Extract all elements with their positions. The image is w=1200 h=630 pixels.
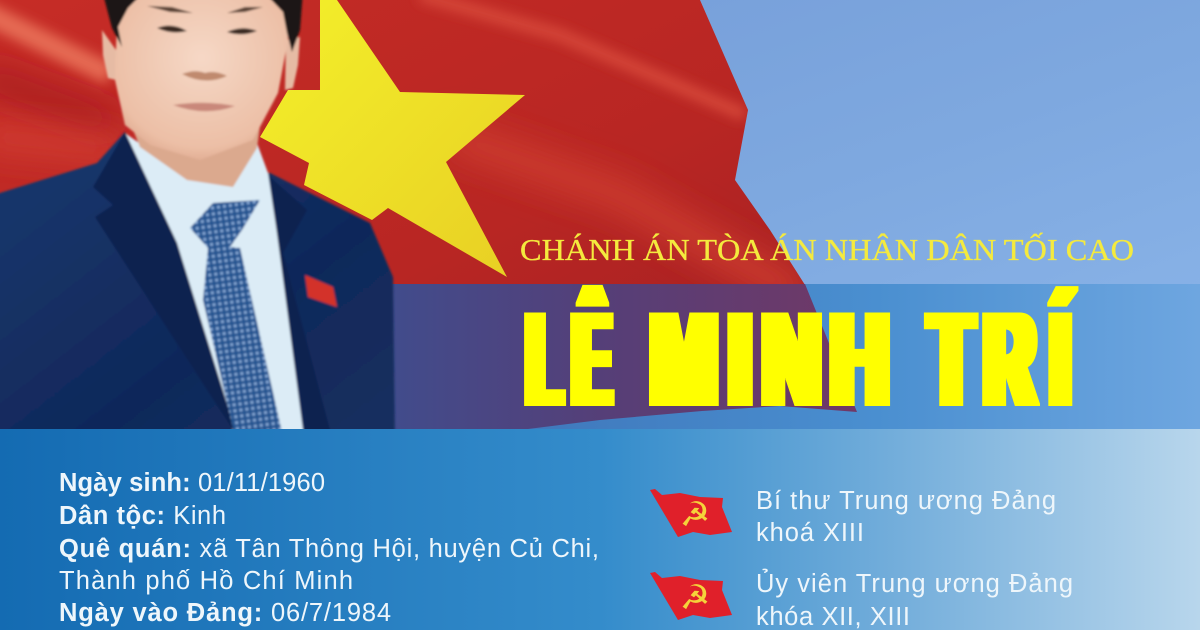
biography text: Ngày vào Đảng: 06/7/1984: [59, 599, 391, 627]
portrait: [0, 0, 395, 445]
subtitle: CHÁNH ÁN TÒA ÁN NHÂN DÂN TỐI CAO: [520, 231, 1134, 267]
neck: [125, 110, 262, 187]
jacket: [0, 132, 395, 445]
name heading: LÊ: [527, 285, 610, 434]
left lapel: [93, 132, 243, 445]
biography text: Dân tộc: Kinh: [59, 502, 226, 530]
yellow star: [260, 0, 525, 277]
name heading: MINH: [651, 286, 888, 434]
tie: [190, 200, 285, 445]
nose: [182, 71, 227, 81]
eyebrows: [147, 6, 263, 13]
party flag icon 2: ☭: [680, 578, 710, 618]
bottom panel: [0, 429, 1200, 630]
biography text: [59, 469, 599, 627]
name heading: TRÍ: [930, 286, 1072, 434]
waving red flag: [0, 0, 804, 284]
hair: [102, 0, 303, 52]
party flag icon 1: ☭: [680, 495, 710, 535]
face: [115, 0, 288, 160]
party flag icon 2: [650, 572, 732, 620]
party positions text: [756, 487, 1073, 630]
party positions text: Bí thư Trung ương Đảng: [756, 487, 1056, 515]
biography text: Thành phố Hồ Chí Minh: [59, 567, 353, 595]
shirt: [125, 133, 305, 445]
name band: [390, 284, 1200, 430]
lapel pin: [305, 275, 337, 307]
right lapel: [270, 177, 334, 445]
eyes: [157, 26, 257, 34]
mouth: [173, 103, 235, 111]
biography text: Quê quán: xã Tân Thông Hội, huyện Củ Chi,: [59, 535, 599, 563]
party flag icon 1: [650, 489, 732, 537]
name heading: [527, 285, 1072, 434]
party positions text: Ủy viên Trung ương Đảng: [756, 568, 1073, 598]
biography text: Ngày sinh: 01/11/1960: [59, 469, 325, 497]
background sky: [0, 0, 1200, 430]
ears: [102, 30, 300, 90]
party positions text: khoá XIII: [756, 519, 864, 547]
